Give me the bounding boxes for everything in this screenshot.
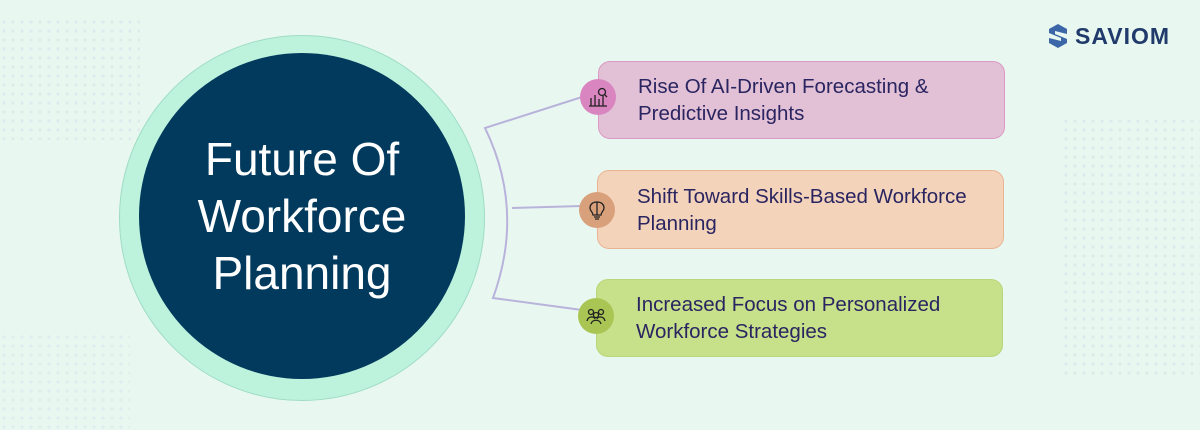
box 3: Workforce Strategies [636, 320, 827, 343]
box 3 [596, 279, 1003, 357]
title [139, 53, 465, 379]
icon: people [578, 298, 614, 334]
central circle [119, 35, 485, 401]
icon: chart [580, 79, 616, 115]
box 1 [598, 61, 1005, 139]
title: Planning [212, 246, 392, 298]
box 1: Rise Of AI-Driven Forecasting & [638, 75, 929, 98]
box 2 [597, 170, 1004, 249]
box 1: Predictive Insights [638, 102, 804, 125]
icon: bulb [579, 192, 615, 228]
box 3: Increased Focus on Personalized [636, 293, 940, 316]
box 2: Shift Toward Skills-Based Workforce [637, 184, 967, 208]
title: Future Of [205, 132, 399, 184]
box 2: Planning [637, 212, 717, 234]
title: Workforce [198, 190, 406, 242]
logo: SAVIOM [1075, 23, 1170, 49]
